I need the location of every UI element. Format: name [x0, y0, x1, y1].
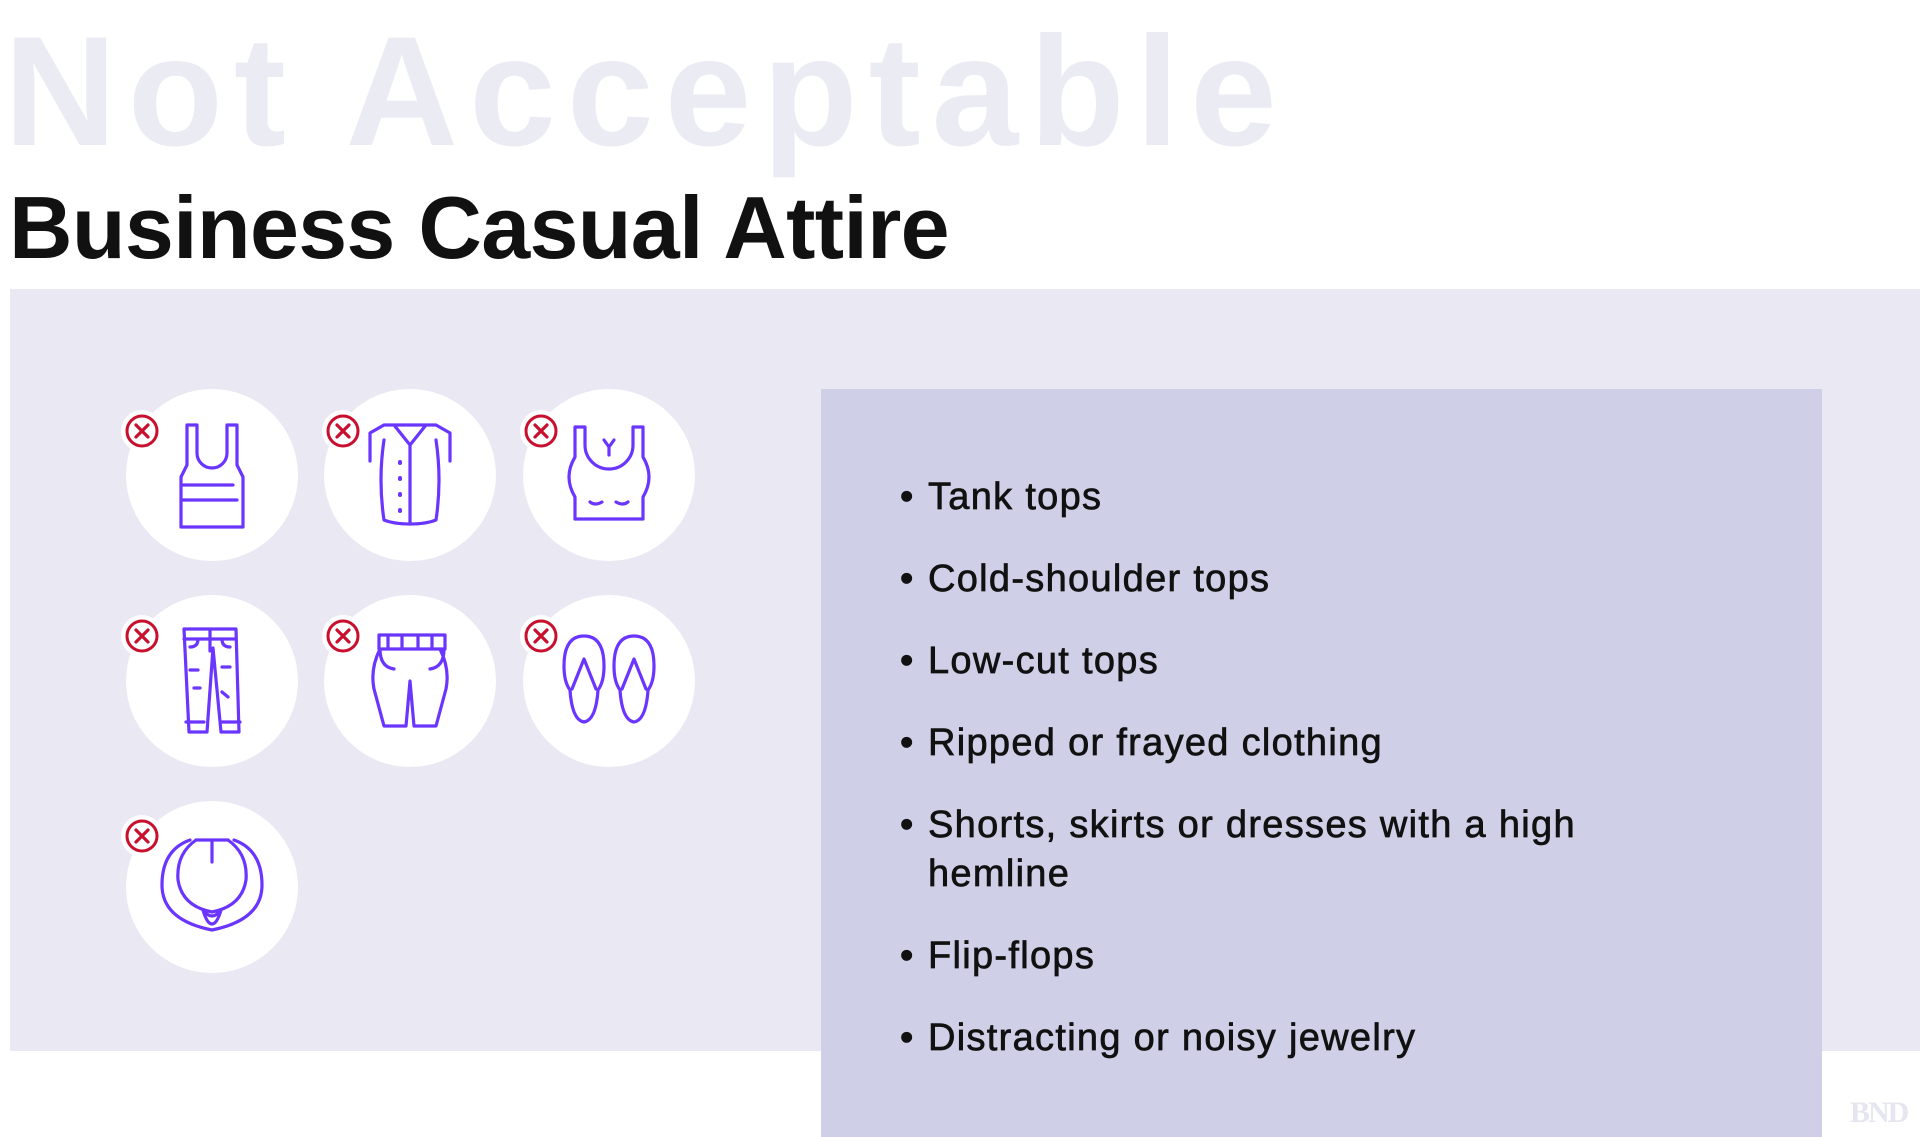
bullet list: • [900, 640, 915, 682]
bullet list: Distracting or noisy jewelry [928, 1017, 1416, 1059]
bullet list [900, 476, 1576, 1059]
bullet list: • [900, 1017, 915, 1059]
bullet list: hemline [928, 853, 1070, 895]
panel: light background [10, 289, 1920, 1051]
bullet list: • [900, 935, 915, 977]
logo: BND [1850, 1096, 1907, 1129]
panel: list box [821, 389, 1822, 1137]
icon: flip-flops [520, 595, 695, 767]
bullet list: Cold-shoulder tops [928, 558, 1270, 600]
heading: Business Casual Attire [9, 178, 949, 277]
bullet list: Shorts, skirts or dresses with a high [928, 804, 1576, 846]
icon: shorts [322, 595, 496, 767]
background title: Not Acceptable [4, 5, 1288, 179]
icon: low-cut top [520, 389, 695, 561]
icon grid [121, 389, 695, 973]
icon: necklace [121, 801, 298, 973]
icon: cold-shoulder top [322, 389, 496, 561]
icon: tank top [121, 389, 298, 561]
bullet list: • [900, 476, 915, 518]
bullet list: Ripped or frayed clothing [928, 722, 1383, 764]
icon: ripped jeans [121, 595, 298, 767]
bullet list: Flip-flops [928, 935, 1095, 977]
bullet list: • [900, 722, 915, 764]
bullet list: • [900, 558, 915, 600]
bullet list: Tank tops [928, 476, 1102, 518]
bullet list: • [900, 804, 915, 846]
bullet list: Low-cut tops [928, 640, 1159, 682]
